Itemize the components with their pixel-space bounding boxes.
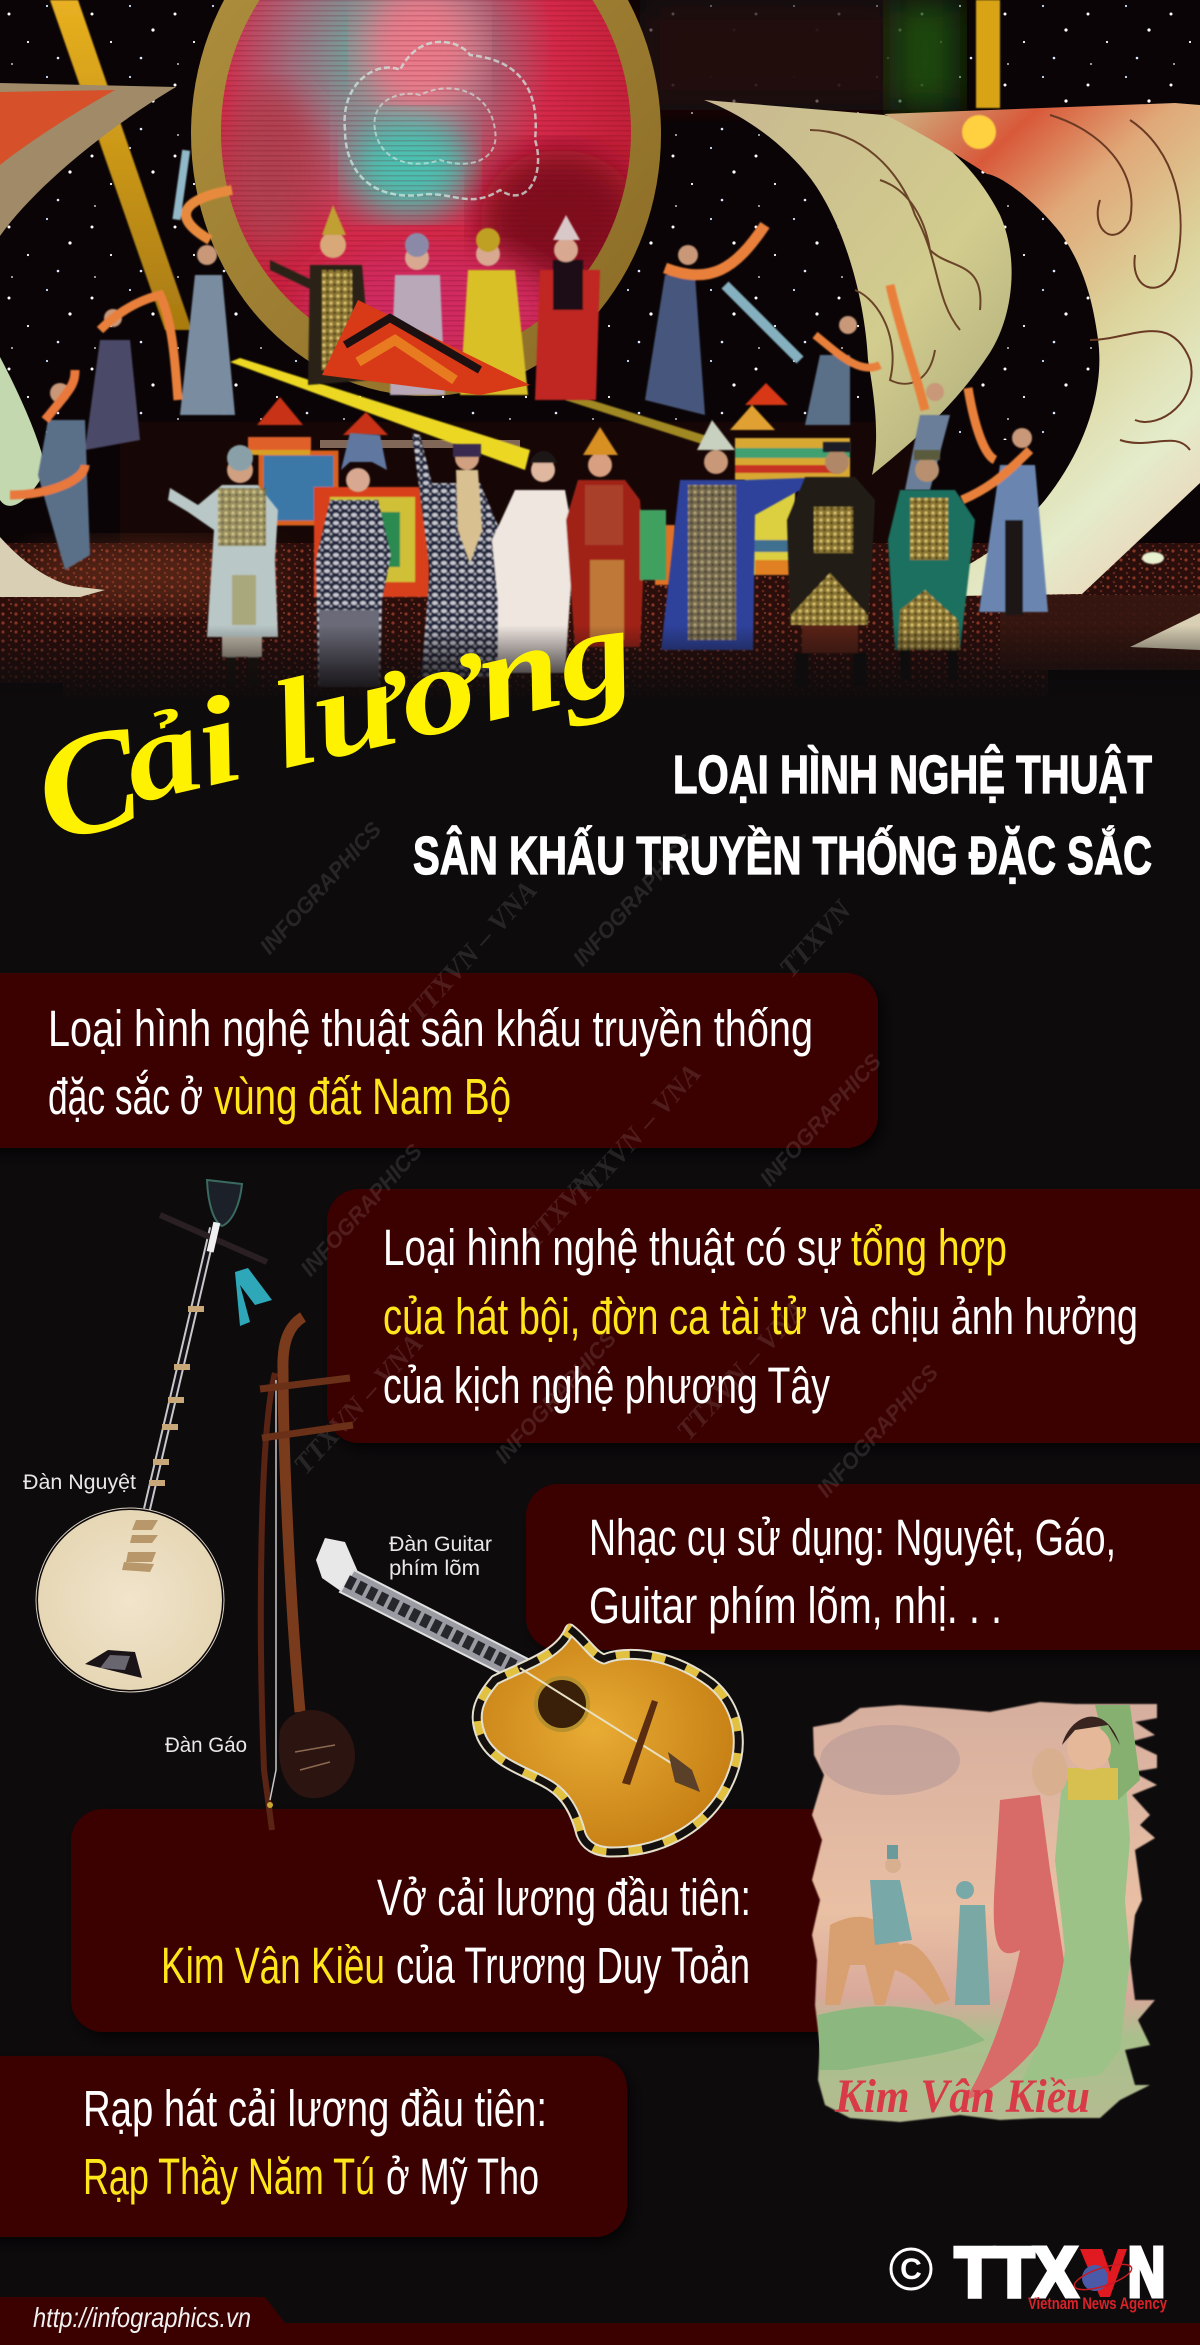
watermarks: INFOGRAPHICS xyxy=(812,1360,943,1502)
green hillside xyxy=(818,2006,985,2070)
watermarks: INFOGRAPHICS xyxy=(296,1139,427,1281)
hero photo: cải lương stage performance xyxy=(0,0,1200,700)
logo: copyright mark xyxy=(891,2249,931,2289)
icon: Đàn Gáo coconut fiddle xyxy=(260,1317,355,1830)
label: Đàn Guitar phím lõm xyxy=(389,1533,492,1580)
image: Kim Vân Kiều painting xyxy=(812,1702,1157,2123)
performer: navy and white robe xyxy=(316,433,391,687)
watermarks: TTXVN – VNA xyxy=(671,1294,813,1447)
panel: first cải lương play: Kim Vân Kiều xyxy=(161,1937,385,1994)
performer: black robe with long white beard xyxy=(412,433,502,677)
woman in green robe xyxy=(1020,1770,1130,2085)
watermarks: TTXVN – VNA xyxy=(566,1058,708,1211)
logo: copyright mark: C xyxy=(900,2253,922,2286)
panel: art form of the Southern region: Loại hình nghệ thuật sân khấu truyền thống xyxy=(48,1000,813,1057)
soldiers with red hats and banners xyxy=(240,383,850,597)
panel: synthesis of theatre traditions xyxy=(327,1189,1200,1443)
icon: jazz guitar with scalloped frets xyxy=(316,1538,738,1852)
rider in blue xyxy=(870,1880,912,1945)
logo: TTXVN Vietnam News Agency: N xyxy=(1128,2233,1165,2311)
woman in pink robe xyxy=(965,1795,1070,2100)
panel: synthesis of theatre traditions: của hát bội, đờn ca tài tử xyxy=(383,1288,807,1345)
watermarks: INFOGRAPHICS xyxy=(755,1049,886,1191)
icon: Đàn Nguyệt moon lute xyxy=(36,1180,272,1692)
performer: teal armour xyxy=(888,450,975,680)
performer: pale blue robe xyxy=(168,445,278,687)
left spotlight beam xyxy=(50,0,192,330)
watermarks: TTXVN xyxy=(517,1165,603,1255)
watermarks: INFOGRAPHICS xyxy=(568,829,699,971)
panel: synthesis of theatre traditions: Loại hình nghệ thuật có sự xyxy=(383,1219,842,1276)
watermarks: TTXVN – VNA xyxy=(288,1328,430,1481)
watermarks: TTXVN xyxy=(773,894,859,984)
top-right spotlight beam xyxy=(976,0,1000,108)
panel: art form of the Southern region: vùng đất Nam Bộ xyxy=(214,1068,511,1125)
walking man in blue xyxy=(955,1905,990,2005)
logo: TTXVN Vietnam News Agency: TTX xyxy=(955,2233,1077,2311)
yellow spotlight across stage xyxy=(230,358,530,470)
panel: art form of the Southern region xyxy=(0,973,878,1148)
title: Cải lương: ải lương xyxy=(110,579,646,830)
panel: first cải lương theatre: Rạp hát cải lương đầu tiên: xyxy=(83,2080,547,2137)
panel: first cải lương theatre: ở Mỹ Tho xyxy=(386,2148,539,2205)
gold ring and LED screen xyxy=(191,0,661,396)
footer band with URL tab: http://infographics.vn xyxy=(33,2302,251,2333)
panel: first cải lương theatre xyxy=(0,2056,627,2237)
panel: first cải lương theatre: Rạp Thầy Năm Tú xyxy=(83,2148,375,2205)
panel: art form of the Southern region: đặc sắc ở xyxy=(48,1068,203,1125)
watermarks: INFOGRAPHICS xyxy=(255,817,386,959)
panel: musical instruments used: Guitar phím lõm, nhị. . . xyxy=(589,1577,1002,1634)
stage lights xyxy=(962,115,996,149)
label: Đàn Guitar phím lõm: phím lõm xyxy=(389,1557,480,1580)
performer: red armour xyxy=(566,427,666,647)
right cream crescent 1 xyxy=(704,100,1012,475)
logo: TTXVN Vietnam News Agency xyxy=(955,2233,1167,2313)
front row performers xyxy=(168,420,975,687)
flag of red, black and orange stripes xyxy=(322,300,530,395)
panel: first cải lương play: Vở cải lương đầu tiên: xyxy=(377,1869,751,1926)
title: Cải lương xyxy=(21,579,646,873)
performer: white robe xyxy=(492,451,574,673)
horse xyxy=(825,1917,950,2005)
stage platform and floor xyxy=(120,422,920,552)
label: Đàn Gáo: Đàn Gáo xyxy=(165,1734,247,1757)
performer: black and gold armour xyxy=(787,442,875,687)
watermarks xyxy=(255,817,943,1502)
panel: synthesis of theatre traditions: của kịch nghệ phương Tây xyxy=(383,1357,830,1414)
panel: first cải lương play: của Trương Duy Toản xyxy=(396,1937,750,1994)
label: Đàn Nguyệt: Đàn Nguyệt xyxy=(23,1471,136,1494)
left cream crescents xyxy=(0,83,176,597)
footer band with URL tab xyxy=(0,2297,1200,2345)
dancers in blue-grey with orange ribbons xyxy=(10,150,1048,615)
watermarks: TTXVN – VNA xyxy=(402,875,544,1028)
subtitle heading xyxy=(413,744,1152,886)
painted title: Kim Vân Kiều xyxy=(834,2070,1090,2123)
panel: first cải lương play xyxy=(71,1809,871,2032)
title: Cải lương: C xyxy=(21,694,157,873)
performer: blue robe with gold xyxy=(661,420,805,650)
label: Đàn Guitar phím lõm: Đàn Guitar xyxy=(389,1533,492,1556)
upper row performers xyxy=(270,205,600,400)
watermarks: INFOGRAPHICS xyxy=(490,1326,621,1468)
icon: teal tassel xyxy=(235,1268,272,1326)
right cream crescent 2 xyxy=(884,103,1200,596)
panel: musical instruments used xyxy=(526,1484,1200,1650)
panel: synthesis of theatre traditions: tổng hợp xyxy=(851,1219,1007,1276)
fade of photo into background xyxy=(0,625,1200,700)
